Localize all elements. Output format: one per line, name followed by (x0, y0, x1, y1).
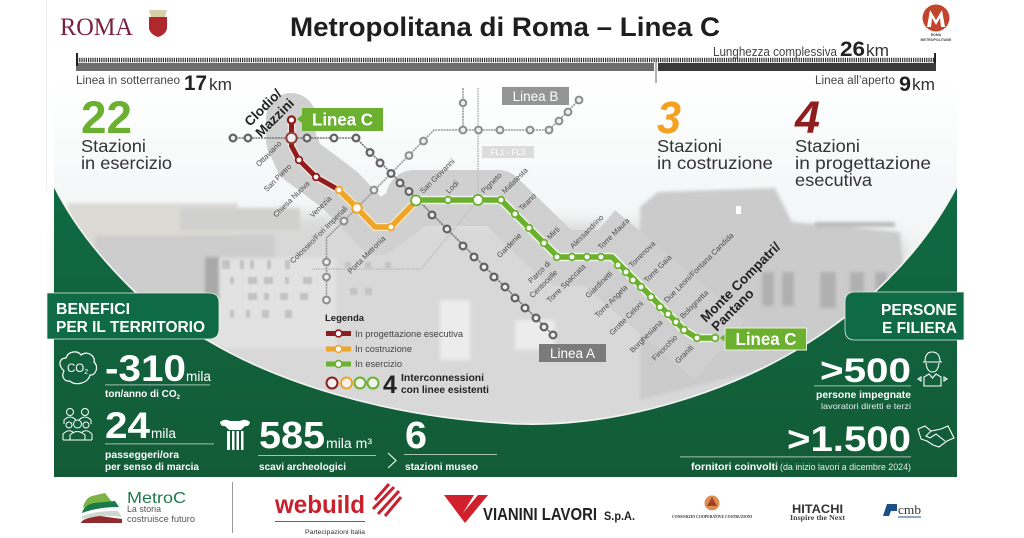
station names: San Giovanni (418, 157, 457, 195)
logo: Vianini Lavori: S.p.A. (604, 509, 635, 523)
background photo: building windows (222, 260, 391, 318)
stat: -310 mila: mila (186, 369, 211, 384)
length label: underground: km (209, 75, 232, 94)
station names (254, 139, 736, 365)
station names: Finocchio (650, 333, 679, 362)
stat: >500 people (814, 352, 911, 411)
legend: 4 interchanges: con linee esistenti (401, 385, 489, 396)
stat: -310 mila: ton/anno di CO (105, 389, 177, 400)
terminus name: Monte Compatri/Pantano: Monte Compatri/ (698, 239, 784, 325)
station names: Pigneto (479, 171, 504, 195)
metro line C: design section (286, 116, 339, 190)
stat: 3 stations under construction (657, 92, 773, 173)
title: Metropolitana di Roma – Linea C (290, 12, 720, 42)
legend: 4 interchanges: Interconnessioni (401, 373, 484, 384)
stat: -310 mila (105, 348, 211, 401)
label: Linea C bottom (720, 328, 806, 350)
station names: Torre Maura (596, 216, 632, 251)
stat: 585 mila m3: mila m³ (326, 436, 373, 451)
station names: Torre Spaccata (545, 262, 588, 305)
stat: 24 mila (105, 405, 214, 473)
legend row: in service (326, 359, 402, 369)
panel: benefici heading: BENEFICI (56, 301, 130, 318)
legend row: in design: In progettazione esecutiva (355, 329, 463, 339)
station names: Gardenie (495, 231, 523, 260)
station names: Alessandrino (568, 213, 605, 250)
station names: Bolognetta (678, 288, 711, 320)
stat: 4 stations in design: esecutiva (795, 170, 872, 190)
stat: 24 mila: 24 (105, 405, 150, 446)
length label: total: km (866, 41, 889, 60)
station names: Centocelle (528, 268, 559, 300)
logo: webuild: webuild (274, 491, 365, 519)
station names: Borghesiana (628, 318, 665, 355)
stat: -310 mila: -310 (105, 348, 186, 389)
station names: Torre Angela (593, 283, 630, 320)
logo: MetroC: MetroC (127, 490, 186, 507)
logo: Vianini Lavori: VIANINI LAVORI (483, 504, 597, 524)
stat: 6 museum stations: 6 (405, 415, 427, 457)
logo: Vianini Lavori (444, 495, 635, 524)
station names: Chiesa Nuova (271, 179, 312, 219)
stat: 585 mila m3: scavi archeologici (259, 462, 346, 473)
station names: Giardinetti (584, 269, 615, 300)
stat: 4 stations in design: 4 (794, 92, 820, 143)
terminus name: Clodio/Mazzini: Clodio/ (242, 86, 285, 129)
station names: Torre Gaia (642, 252, 674, 284)
label: Linea B (502, 87, 569, 105)
stat: 24 mila: passeggeri/ora (105, 450, 179, 461)
logo: webuild (274, 484, 401, 536)
terminus name: Clodio/Mazzini: Mazzini (253, 96, 297, 140)
icon: handshake (918, 426, 954, 447)
station names: Malatesta (500, 165, 530, 195)
legend row: in service: In esercizio (355, 359, 402, 369)
label: Linea A: Linea A (550, 346, 595, 361)
stat: -310 mila: 2 (177, 395, 181, 401)
stat: 3 stations under construction: in costruzione (657, 153, 773, 173)
legend (325, 313, 489, 399)
stat: 6 museum stations: stazioni museo (405, 462, 478, 473)
route corridor (291, 118, 720, 350)
icon: CO2 cloud: 2 (84, 369, 88, 376)
station names: Ottaviano (254, 139, 283, 168)
length ruler (76, 53, 936, 83)
logo: cmb: cmb (898, 502, 921, 517)
legend row: under construction (326, 344, 412, 354)
length label: total: 26 (840, 38, 865, 61)
logo: Hitachi: Inspire the Next (790, 514, 846, 522)
station names: Grotte Celoni (607, 299, 646, 337)
stat: 22 stations in service: in esercizio (81, 153, 172, 173)
FL1-FL3 railway: FL1 - FL3 (491, 148, 526, 157)
terminus name: Clodio/Mazzini (242, 86, 297, 140)
logo: Consorzio Cooperative Costruzioni (672, 496, 752, 519)
legend: 4 interchanges: 4 (383, 371, 397, 399)
stat: >1.500 suppliers: (da inizio lavori a dicembre 2024) (780, 462, 911, 472)
legend: 4 interchanges (383, 371, 489, 399)
logo: webuild: Partecipazioni Italia (305, 529, 365, 536)
stat: 22 stations in service: Stazioni (81, 136, 146, 156)
logo: MetroC: costruisce futuro (127, 514, 195, 525)
terminus name: Monte Compatri/Pantano: Pantano (709, 286, 757, 334)
logo: Roma Metropolitane: ROMA (931, 33, 942, 37)
logo: cmb (883, 502, 921, 518)
stat: 585 mila m3 (258, 415, 376, 473)
panel: persone heading (845, 292, 964, 340)
station names: Teano (517, 191, 538, 212)
station names: Parco di (526, 259, 553, 285)
length label: underground: 17 (184, 72, 207, 95)
stat: >500 people: persone impegnate (816, 389, 911, 401)
icon: CO2 cloud (60, 352, 97, 384)
stat: 22 stations in service: 22 (81, 92, 132, 143)
legend: Legenda (325, 313, 365, 324)
length label: open air (815, 73, 935, 96)
stat: >1.500 suppliers: fornitori coinvolti (691, 462, 778, 473)
length label: total (713, 38, 889, 61)
length label: open air: 9 (899, 73, 911, 96)
station names: Graniti (673, 343, 696, 365)
logo: MetroC: La storia (127, 504, 162, 515)
logo: Roma (60, 10, 167, 41)
stat: >500 people: lavoratori diretti e terzi (821, 401, 911, 411)
panel: persone heading: E FILIERA (882, 320, 957, 337)
stat: 585 mila m3: 585 (259, 415, 325, 457)
logo: Roma Metropolitane: METROPOLITANE (921, 38, 952, 42)
legend: interchange rings (326, 378, 378, 388)
background photo: Rome skyline and Colosseum (54, 80, 957, 430)
stat: 6 museum stations (404, 415, 497, 473)
FL1-FL3 railway (312, 88, 534, 269)
stat: 4 stations in design: in progettazione (795, 153, 931, 173)
station names: Torrenova (627, 239, 658, 269)
label: Linea C top (297, 108, 383, 131)
legend row: under construction: In costruzione (355, 344, 412, 354)
stat: >500 people: >500 (820, 352, 911, 390)
panel: benefici heading (47, 293, 219, 339)
stat: 4 stations in design (794, 92, 931, 190)
icon: ionic column (220, 420, 250, 450)
stat: 4 stations in design: Stazioni (795, 136, 860, 156)
station names: Venezia (308, 194, 334, 220)
station names: Colosseo/Fori Imperiali (288, 204, 350, 265)
panel: benefici heading: PER IL TERRITORIO (56, 319, 205, 336)
label: Linea B: Linea B (513, 89, 558, 104)
logo: Roma Metropolitane (921, 4, 952, 42)
panel: persone heading: PERSONE (881, 302, 957, 319)
station names: Lodi (444, 179, 461, 195)
stat: >1.500 suppliers (680, 420, 911, 473)
metro line C: construction section (336, 187, 416, 230)
length label: underground: Linea in sotterraneo (76, 73, 180, 87)
station names: Due Leoni/Fontana Candida (662, 230, 736, 304)
length label: open air: km (912, 75, 935, 94)
stat: 22 stations in service (81, 92, 172, 173)
metro line C: operating section (411, 195, 718, 341)
label: Linea C bottom: Linea C (736, 329, 797, 349)
arrow: chevron (388, 453, 396, 468)
icon: worker (918, 352, 947, 386)
green panel background (54, 186, 957, 477)
label: Linea A (539, 344, 606, 362)
stat: 3 stations under construction: Stazioni (657, 136, 722, 156)
icon: passengers (63, 408, 92, 440)
stat: >1.500 suppliers: >1.500 (787, 420, 911, 459)
logo: Hitachi: HITACHI (792, 504, 843, 516)
length label: underground (76, 72, 232, 95)
logo: MetroC (81, 490, 195, 525)
icon: CO2 cloud: CO (67, 363, 84, 375)
length label: open air: Linea all’aperto (815, 75, 895, 87)
logo: Hitachi (790, 504, 846, 522)
stat: 24 mila: mila (151, 426, 176, 441)
label: Linea C top: Linea C (312, 110, 373, 130)
logo: Consorzio Cooperative Costruzioni: CONSORZIO COOPERATIVE COSTRUZIONI (672, 514, 752, 519)
metro line B (323, 88, 582, 303)
metro line A (230, 135, 556, 338)
logo: Roma: ROMA (60, 14, 133, 41)
station names: San Pietro (262, 162, 293, 193)
length label: total: Lunghezza complessiva (713, 45, 837, 59)
stat: 24 mila: per senso di marcia (105, 462, 199, 473)
station names: Porta Metronia (346, 234, 388, 276)
station names: Mirti (545, 225, 562, 241)
stat: 3 stations under construction: 3 (657, 92, 681, 143)
